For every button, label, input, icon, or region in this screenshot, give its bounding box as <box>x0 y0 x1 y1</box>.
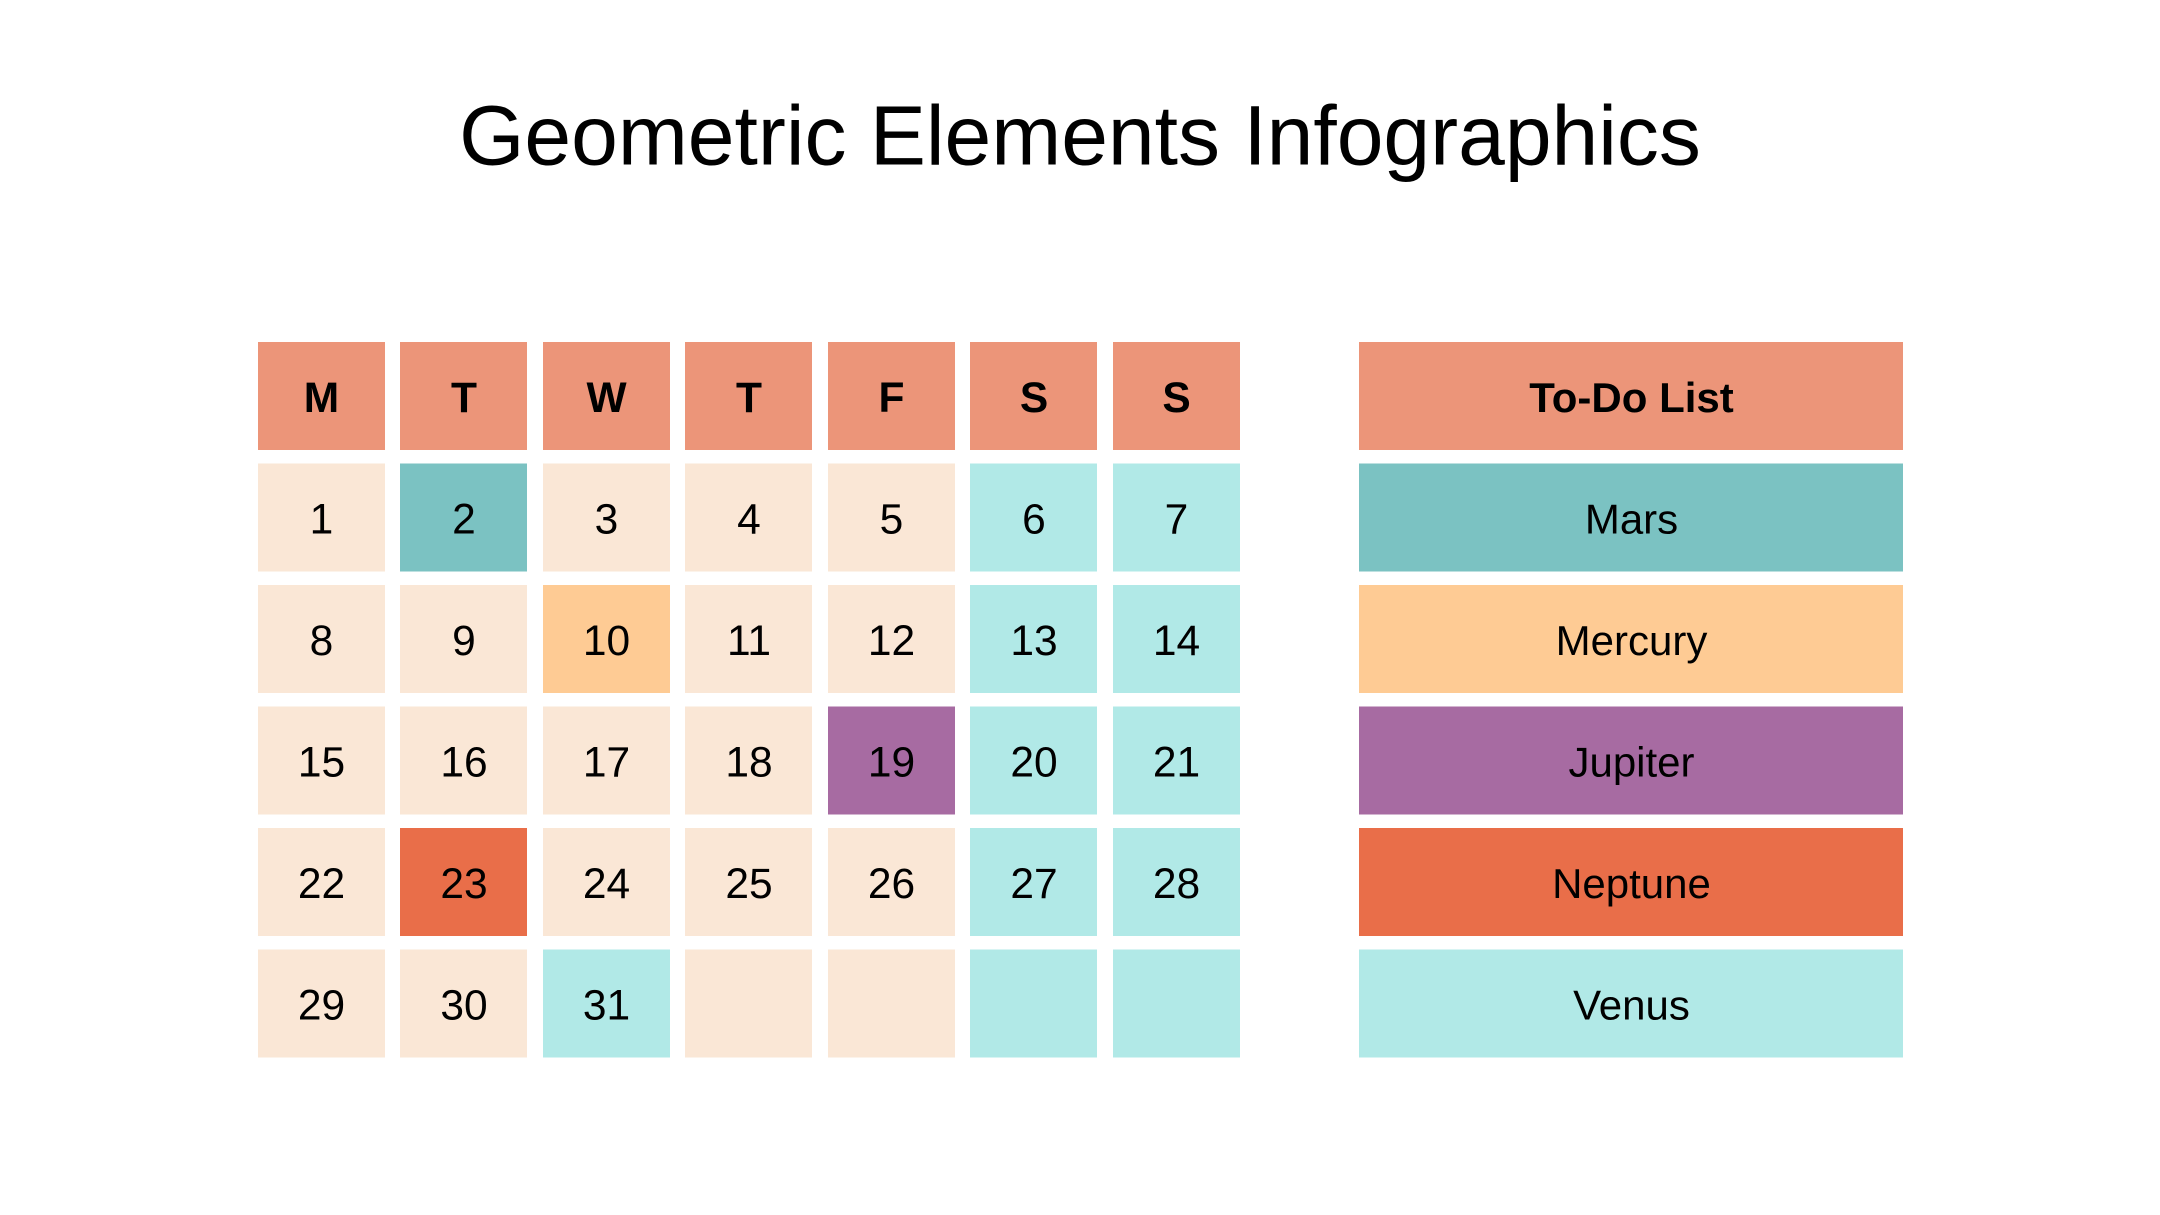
calendar header row: T <box>736 375 762 422</box>
calendar week 4: 26 <box>868 861 915 908</box>
calendar week 1: 3 <box>595 496 618 544</box>
calendar header row: S <box>1020 375 1048 422</box>
calendar header row: M <box>304 375 339 422</box>
calendar week 1: 2 <box>452 496 476 544</box>
calendar header row <box>258 342 1240 450</box>
calendar header row: S <box>1162 375 1191 422</box>
calendar week 4: 23 <box>440 861 488 908</box>
calendar header row: T <box>451 375 477 422</box>
calendar week 2: 11 <box>727 618 771 665</box>
to-do heading: To-Do List <box>1529 374 1734 421</box>
to-do heading <box>1359 342 1903 450</box>
calendar week 1: 6 <box>1022 496 1046 544</box>
to-do item: Mars <box>1359 464 1903 572</box>
calendar week 4: 22 <box>298 861 345 908</box>
calendar week 1: 4 <box>737 496 761 544</box>
to-do item: Jupiter: Jupiter <box>1568 738 1695 786</box>
calendar week 3: 17 <box>583 740 630 786</box>
calendar week 3: 19 <box>868 740 915 786</box>
calendar week 2 <box>258 585 1240 693</box>
to-do item: Mars: Mars <box>1585 496 1678 542</box>
to-do item: Venus <box>1359 950 1903 1058</box>
calendar week 5: 29 <box>298 982 345 1030</box>
calendar week 2: 13 <box>1010 618 1058 665</box>
calendar week 2: 10 <box>583 618 630 665</box>
calendar week 2: 8 <box>310 618 333 665</box>
calendar week 4 <box>258 828 1240 936</box>
calendar header row: W <box>586 375 627 422</box>
calendar week 1: 1 <box>310 496 333 544</box>
calendar week 2: 9 <box>452 618 476 665</box>
calendar week 3: 20 <box>1010 740 1058 786</box>
calendar week 1 <box>258 464 1240 572</box>
calendar week 3: 18 <box>725 740 773 786</box>
to-do item: Venus: Venus <box>1573 982 1690 1028</box>
to-do item: Jupiter <box>1359 706 1903 814</box>
calendar week 1: 5 <box>880 496 903 544</box>
calendar week 4: 24 <box>583 861 630 908</box>
calendar week 3: 15 <box>298 740 345 786</box>
to-do item: Neptune <box>1359 828 1903 936</box>
title: Geometric Elements Infographics <box>459 88 1701 182</box>
calendar week 4: 28 <box>1153 861 1200 908</box>
calendar week 2: 12 <box>868 618 915 665</box>
calendar week 5: 30 <box>440 982 488 1030</box>
calendar week 1: 7 <box>1165 496 1188 544</box>
calendar week 4: 27 <box>1010 861 1058 908</box>
calendar week 3: 21 <box>1153 740 1200 786</box>
calendar week 5: 31 <box>583 982 630 1030</box>
calendar week 3: 16 <box>440 740 488 786</box>
to-do item: Neptune: Neptune <box>1552 860 1711 907</box>
calendar week 4: 25 <box>725 861 773 908</box>
to-do item: Mercury: Mercury <box>1556 617 1707 664</box>
calendar header row: F <box>879 375 904 422</box>
panel: to-do list <box>1359 342 1903 1058</box>
to-do item: Mercury <box>1359 585 1903 693</box>
calendar week 5 <box>258 950 1240 1058</box>
panel: calendar <box>258 342 1240 1058</box>
calendar week 3 <box>258 706 1240 814</box>
calendar week 2: 14 <box>1153 618 1200 665</box>
